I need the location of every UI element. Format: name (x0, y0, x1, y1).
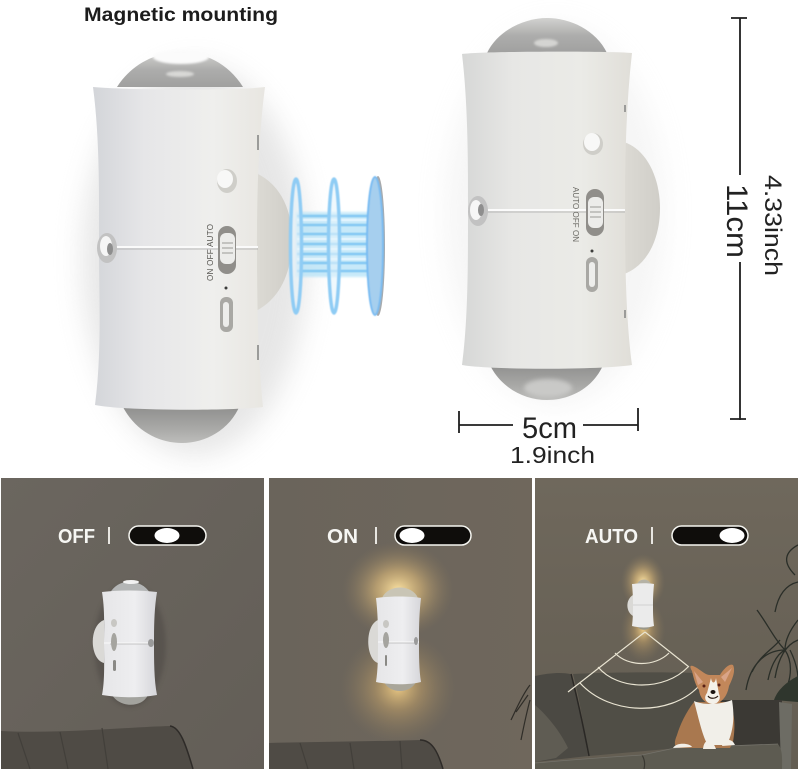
slider labels: AUTO OFF ON (571, 187, 580, 242)
plant (746, 545, 798, 702)
width in inches: 1.9inch (510, 442, 595, 468)
wall lamp (627, 580, 654, 630)
mode label: OFF (58, 526, 95, 548)
height in cm: 11cm (720, 184, 753, 258)
divider (651, 527, 653, 544)
divider (108, 527, 110, 544)
indicator dot (224, 286, 228, 290)
width in cm: 5cm (522, 412, 577, 445)
throw pillow (535, 705, 568, 762)
wall (269, 478, 532, 769)
dog body (675, 702, 734, 748)
magnetic field graphic (290, 176, 385, 316)
push button (583, 133, 603, 155)
top lens dome (117, 50, 243, 87)
panel: AUTO mode (535, 478, 798, 769)
corgi dog (673, 665, 735, 749)
push button (217, 169, 237, 193)
side dimple (97, 233, 117, 263)
divider (375, 527, 377, 544)
width arrow line (459, 408, 638, 433)
height dimension (720, 18, 786, 420)
ring 2 (328, 179, 340, 313)
panel: OFF mode (1, 478, 264, 769)
USB-C port (220, 297, 233, 332)
wall (1, 478, 264, 769)
sofa arm (779, 702, 792, 769)
motion sensor arcs (568, 632, 698, 708)
top lens dome (487, 18, 607, 53)
sofa (535, 672, 792, 769)
toggle switch (129, 526, 206, 545)
mounting disc (256, 173, 292, 311)
title: Magnetic mounting (84, 5, 278, 26)
slider labels: ON OFF AUTO (206, 224, 215, 281)
panel: ON mode (269, 478, 532, 769)
toggle switch (395, 526, 471, 545)
mounting disc (624, 142, 660, 274)
left cushion (535, 673, 588, 762)
bottom lens dome (489, 363, 604, 400)
indicator dot (590, 250, 594, 252)
mode slider (586, 189, 604, 236)
ring 1 (290, 179, 302, 313)
upper light glow (624, 558, 662, 602)
plant (511, 685, 530, 740)
USB-C port (586, 257, 598, 292)
right back (720, 700, 782, 748)
side dimple (468, 196, 488, 226)
lamp body (462, 52, 632, 369)
mode label: AUTO (585, 526, 638, 548)
lamp body (93, 87, 265, 410)
lower light glow (350, 648, 445, 734)
bottom lens dome (122, 405, 240, 443)
mode label: ON (327, 526, 358, 548)
product photo: dimension view (445, 18, 665, 405)
toggle switch (672, 526, 748, 545)
sofa (1, 726, 193, 769)
dog head (690, 665, 734, 704)
mode slider (218, 226, 236, 274)
sofa (269, 740, 443, 769)
field lines (296, 212, 376, 277)
height in inches: 4.33inch (759, 175, 786, 276)
upper light glow (350, 549, 446, 626)
seat (680, 744, 782, 769)
wall lamp (368, 588, 421, 691)
width dimension (459, 408, 638, 468)
height arrow line (730, 18, 747, 420)
lower light glow (625, 608, 661, 656)
wall lamp (93, 580, 166, 707)
wall sensor notches (257, 135, 259, 360)
main cushion (573, 672, 712, 756)
wall (535, 478, 798, 769)
product photo: magnetic lamp (83, 50, 307, 455)
metal plate (367, 176, 385, 316)
